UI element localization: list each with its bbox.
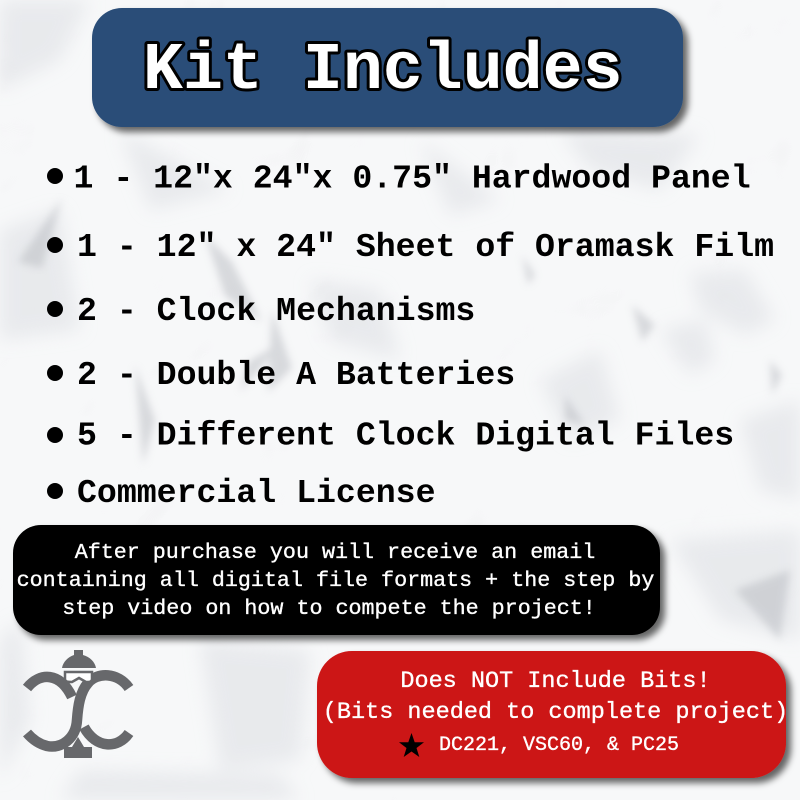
item 4: 2 - Double A Batteries (77, 356, 515, 394)
red callout: bits not included (317, 651, 788, 778)
item 5: 5 - Different Clock Digital Files (77, 416, 734, 454)
callout text (17, 540, 654, 621)
callout text: (Bits needed to complete project) (323, 699, 788, 726)
icon: star (399, 733, 424, 757)
title banner (92, 8, 683, 127)
callout text: step video on how to compete the project! (62, 596, 596, 621)
callout text: After purchase you will receive an email (75, 540, 595, 565)
item 2: 1 - 12" x 24" Sheet of Oramask Film (77, 228, 774, 266)
callout text (323, 668, 788, 757)
icon: hard hat and goggles logo (27, 650, 129, 758)
item 6: Commercial License (77, 474, 435, 512)
item 3: 2 - Clock Mechanisms (77, 292, 475, 330)
title: Kit Includes (143, 33, 623, 108)
callout text: containing all digital file formats + the step by (17, 568, 654, 593)
callout text: Does NOT Include Bits! (400, 668, 711, 695)
item 1: 1 - 12"x 24"x 0.75" Hardwood Panel (74, 160, 751, 198)
black callout: purchase info (13, 525, 660, 635)
callout text: DC221, VSC60, & PC25 (439, 734, 679, 757)
list of kit items (47, 160, 774, 512)
